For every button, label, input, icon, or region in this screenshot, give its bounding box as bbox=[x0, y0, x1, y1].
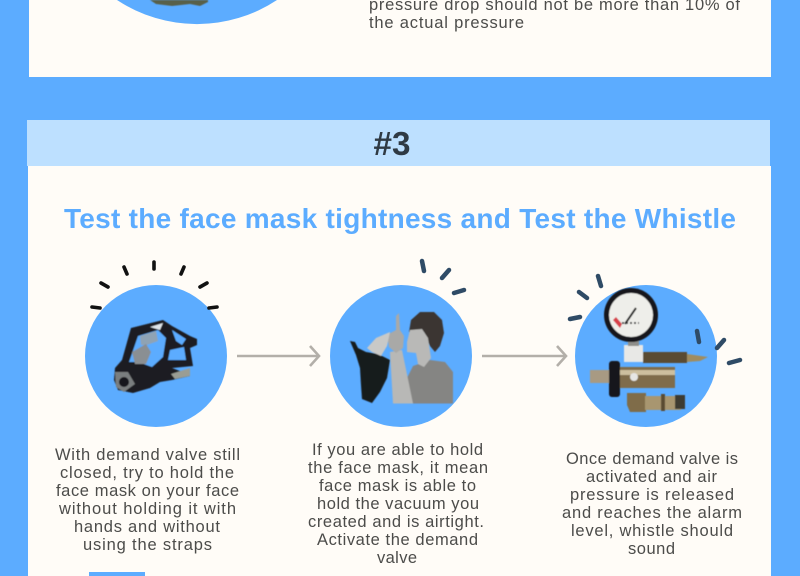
caption 2: If you are able to hold bbox=[312, 441, 483, 459]
icon: person testing mask bbox=[330, 261, 472, 427]
previous step text bbox=[369, 0, 740, 32]
panel: step 3 bbox=[27, 120, 771, 576]
caption 3: level, whistle should bbox=[571, 522, 733, 540]
next element top edge bbox=[89, 572, 145, 576]
icon: previous step circle bbox=[117, 0, 277, 24]
caption 1: hands and without bbox=[74, 518, 220, 536]
caption 1: without holding it with bbox=[58, 500, 236, 518]
caption 2 bbox=[308, 441, 488, 567]
caption 2: valve bbox=[377, 549, 417, 567]
step number header: #3 bbox=[374, 125, 410, 162]
caption 2: Activate the demand bbox=[317, 531, 478, 549]
panel: previous step bbox=[29, 0, 771, 77]
caption 1: closed, try to hold the bbox=[60, 464, 234, 482]
icon: face mask bbox=[85, 262, 227, 427]
icon: pressure gauge and whistle bbox=[570, 276, 740, 427]
heading: Test the face mask tightness and Test the Whistle bbox=[64, 203, 736, 234]
caption 3: and reaches the alarm bbox=[562, 504, 742, 522]
caption 3: Once demand valve is bbox=[566, 450, 738, 468]
arrow 2 bbox=[482, 346, 566, 366]
caption 3 bbox=[562, 450, 742, 558]
caption 2: created and is airtight. bbox=[308, 513, 484, 531]
step number header bbox=[27, 120, 770, 166]
caption 2: face mask is able to bbox=[319, 477, 476, 495]
caption 1 bbox=[55, 446, 240, 554]
arrow 1 bbox=[237, 346, 319, 366]
caption 2: hold the vacuum you bbox=[317, 495, 479, 513]
caption 1: face mask on your face bbox=[56, 482, 239, 500]
caption 3: activated and air bbox=[586, 468, 718, 486]
caption 1: With demand valve still bbox=[55, 446, 240, 464]
previous step text: the actual pressure bbox=[369, 14, 524, 32]
caption 2: the face mask, it mean bbox=[308, 459, 488, 477]
caption 3: pressure is released bbox=[570, 486, 734, 504]
caption 1: using the straps bbox=[83, 536, 212, 554]
caption 3: sound bbox=[628, 540, 675, 558]
